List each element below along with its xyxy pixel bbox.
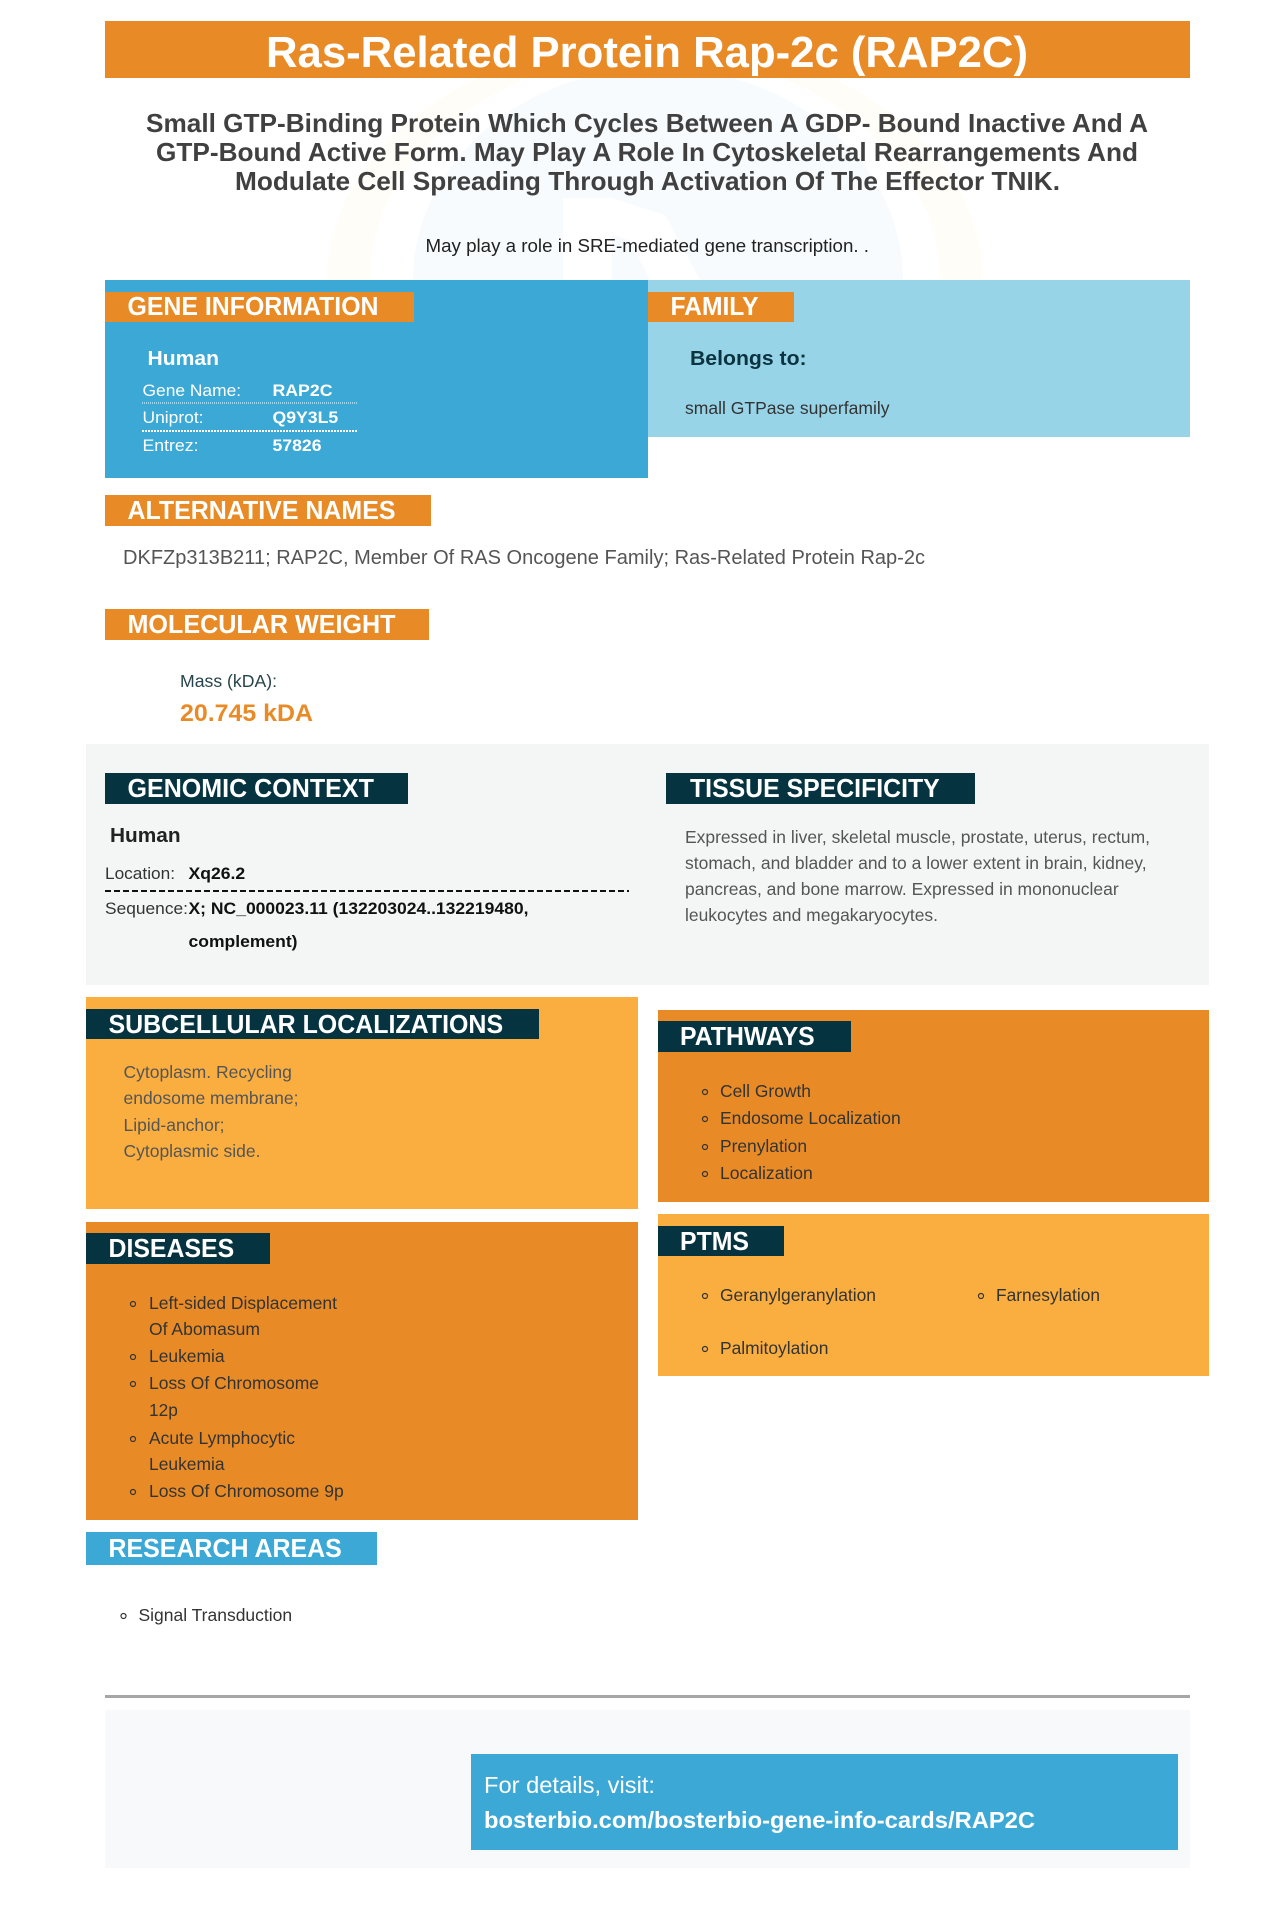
- panel: family: [648, 280, 1190, 437]
- heading: family: [648, 292, 794, 322]
- location and sequence: Sequence:: [105, 899, 188, 918]
- family text: small GTPase superfamily: [685, 398, 890, 418]
- subtitle: Small GTP-Binding Protein Which Cycles Between A GDP- Bound Inactive And A: [146, 110, 1148, 138]
- alternative names text: DKFZp313B211; RAP2C, Member Of RAS Oncogene Family; Ras-Related Protein Rap-2c: [123, 547, 925, 569]
- disease list: Acute Lymphocytic: [149, 1428, 295, 1448]
- function note: May play a role in SRE-mediated gene transcription. .: [426, 235, 869, 256]
- callout: details link: For details, visit:: [484, 1772, 655, 1798]
- panel: subcellular localizations: [86, 997, 638, 1209]
- heading: tissue specificity: TISSUE SPECIFICITY: [690, 775, 940, 803]
- location and sequence: Xq26.2: [188, 864, 245, 883]
- heading: ptms: PTMS: [680, 1228, 749, 1256]
- disease list: [130, 1293, 344, 1501]
- gene fields: [142, 381, 357, 455]
- location and sequence: [105, 864, 629, 951]
- ptm list: Palmitoylation: [720, 1338, 828, 1358]
- research areas list: Signal Transduction: [138, 1605, 292, 1625]
- location and sequence: X; NC_000023.11 (132203024..132219480,: [188, 899, 528, 918]
- tissue text: leukocytes and megakaryocytes.: [685, 905, 938, 925]
- title banner: [105, 21, 1190, 78]
- panel: pathways: [658, 1010, 1209, 1202]
- heading: molecular weight: MOLECULAR WEIGHT: [128, 611, 396, 639]
- disease list: 12p: [149, 1400, 178, 1420]
- subtitle: GTP-Bound Active Form. May Play A Role In Cytoskeletal Rearrangements And: [156, 139, 1138, 167]
- disease list: Leukemia: [149, 1454, 225, 1474]
- heading: pathways: PATHWAYS: [680, 1023, 815, 1051]
- heading: diseases: DISEASES: [108, 1235, 234, 1263]
- localization text: endosome membrane;: [124, 1088, 298, 1108]
- footer rule: [105, 1695, 1190, 1698]
- heading: pathways: [658, 1021, 851, 1052]
- disease list: Of Abomasum: [149, 1319, 260, 1339]
- heading: genomic context: GENOMIC CONTEXT: [128, 775, 374, 803]
- pathway list: [702, 1081, 901, 1183]
- footer panel: [105, 1710, 1190, 1868]
- gene fields: Uniprot:: [142, 408, 204, 427]
- species: Human: [110, 825, 181, 847]
- disease list: Left-sided Displacement: [149, 1293, 337, 1313]
- gene fields: Gene Name:: [142, 381, 241, 400]
- panel: ptms: [658, 1214, 1209, 1376]
- pathway list: Prenylation: [720, 1136, 807, 1156]
- watermark logo: [327, 40, 983, 280]
- heading: family: FAMILY: [670, 293, 758, 321]
- panel: diseases: [86, 1222, 638, 1520]
- pathway list: Endosome Localization: [720, 1108, 901, 1128]
- pathway list: Cell Growth: [720, 1081, 811, 1101]
- panel: gene information: [105, 280, 648, 478]
- pathway list: Localization: [720, 1163, 813, 1183]
- heading: research areas: RESEARCH AREAS: [108, 1535, 342, 1563]
- callout: details link: bosterbio.com/bosterbio-gene-info-cards/RAP2C: [484, 1807, 1035, 1833]
- localization text: Cytoplasmic side.: [124, 1141, 260, 1161]
- localization text: Lipid-anchor;: [124, 1115, 224, 1135]
- subtitle: Modulate Cell Spreading Through Activation Of The Effector TNIK.: [235, 168, 1060, 196]
- gene fields: Q9Y3L5: [272, 408, 338, 427]
- location and sequence: complement): [188, 932, 298, 951]
- subtitle: [146, 110, 1148, 196]
- location and sequence: Location:: [105, 864, 175, 883]
- mass value: 20.745 kDA: [180, 700, 313, 727]
- belongs to label: Belongs to:: [690, 348, 807, 370]
- gene fields: 57826: [272, 436, 322, 455]
- ptm list: [702, 1285, 1100, 1358]
- heading: diseases: [86, 1233, 270, 1264]
- gene fields: Entrez:: [142, 436, 198, 455]
- disease list: Loss Of Chromosome 9p: [149, 1481, 344, 1501]
- tissue text: stomach, and bladder and to a lower extent in brain, kidney,: [685, 853, 1147, 873]
- heading: ptms: [658, 1226, 784, 1256]
- title banner: Ras-Related Protein Rap-2c (RAP2C): [266, 28, 1028, 77]
- ptm list: Geranylgeranylation: [720, 1285, 876, 1305]
- callout: details link: [471, 1754, 1178, 1850]
- panel: genomic context and tissue specificity: [86, 744, 1209, 985]
- localization text: Cytoplasm. Recycling: [124, 1062, 292, 1082]
- disease list: Leukemia: [149, 1346, 225, 1366]
- heading: subcellular localizations: SUBCELLULAR LOCALIZATIONS: [108, 1011, 503, 1039]
- tissue text: pancreas, and bone marrow. Expressed in mononuclear: [685, 879, 1119, 899]
- tissue text: Expressed in liver, skeletal muscle, prostate, uterus, rectum,: [685, 827, 1150, 847]
- heading: gene information: GENE INFORMATION: [128, 293, 378, 321]
- tissue text: [685, 827, 1150, 925]
- heading: research areas: [86, 1532, 377, 1565]
- heading: alternative names: ALTERNATIVE NAMES: [128, 497, 396, 525]
- gene fields: RAP2C: [272, 381, 332, 400]
- ptm list: Farnesylation: [996, 1285, 1100, 1305]
- localization text: [124, 1062, 298, 1161]
- species: Human: [148, 348, 219, 370]
- mass label: Mass (kDA):: [180, 671, 277, 691]
- disease list: Loss Of Chromosome: [149, 1373, 319, 1393]
